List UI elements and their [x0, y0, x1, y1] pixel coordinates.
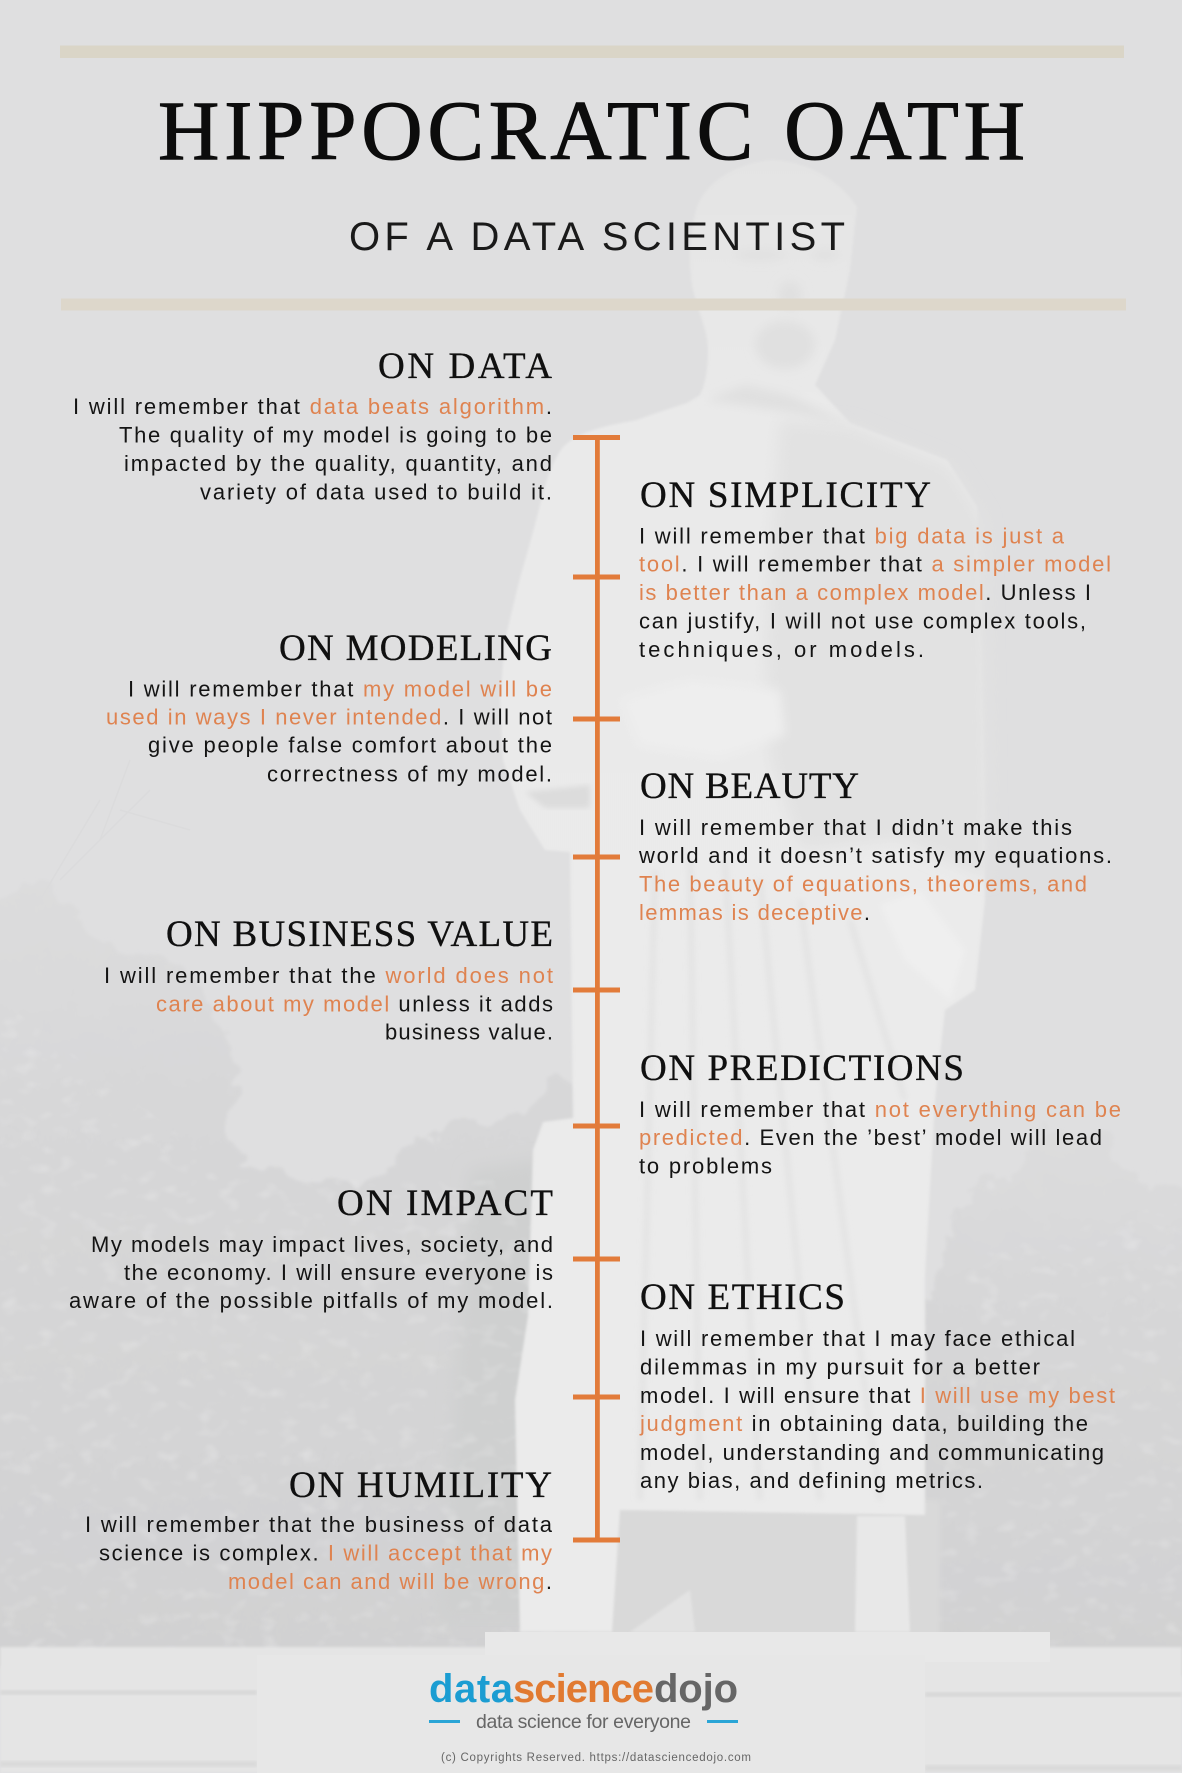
plinth and ledges — [0, 1632, 1182, 1773]
body: give people false comfort about the — [148, 732, 552, 758]
timeline — [573, 435, 620, 1542]
body — [639, 1097, 1121, 1178]
statue — [500, 160, 990, 1632]
body — [85, 1512, 553, 1594]
body: impacted by the quality, quantity, and — [124, 451, 552, 476]
body: I will remember that the business of data — [85, 1512, 553, 1537]
right hand — [880, 890, 965, 1000]
body: correctness of my model. — [267, 762, 552, 786]
body: to problems — [639, 1154, 772, 1178]
panel: on predictions — [639, 1048, 1121, 1178]
body: lemmas is deceptive. — [639, 900, 870, 925]
left foliage — [0, 760, 600, 1670]
body: model can and will be wrong. — [228, 1569, 552, 1594]
logo wordmark: dojo — [654, 1667, 738, 1711]
right foliage — [900, 1130, 1182, 1670]
heading: ON PREDICTIONS — [640, 1048, 964, 1089]
lower header bar — [61, 298, 1126, 310]
heading: ON MODELING — [279, 628, 552, 669]
body: is better than a complex model. Unless I — [639, 580, 1091, 605]
panel: on modeling — [106, 628, 552, 786]
heading: ON DATA — [378, 346, 552, 387]
dark ground behind the feet — [590, 1500, 940, 1640]
body: predicted. Even the ’best’ model will lead — [639, 1125, 1102, 1150]
body: world and it doesn’t satisfy my equations. — [638, 843, 1112, 868]
body: I will remember that my model will be — [128, 676, 552, 702]
body: business value. — [385, 1020, 553, 1044]
body: I will remember that data beats algorithm. — [73, 394, 552, 419]
body: I will remember that not everything can be — [639, 1097, 1121, 1122]
body — [639, 1326, 1115, 1493]
panel: on ethics — [639, 1277, 1115, 1493]
panel: on data — [73, 346, 552, 504]
panel: on beauty — [638, 766, 1112, 925]
body: any bias, and defining metrics. — [640, 1468, 983, 1493]
body: The beauty of equations, theorems, and — [639, 872, 1087, 896]
logo wordmark: data — [429, 1667, 514, 1711]
footer logo panel — [257, 1655, 925, 1773]
panel: on simplicity — [639, 475, 1111, 662]
body: judgment in obtaining data, building the — [639, 1411, 1088, 1436]
panel: on humility — [85, 1465, 553, 1594]
heading: ON HUMILITY — [289, 1465, 552, 1506]
body — [104, 963, 553, 1044]
body: science is complex. I will accept that my — [99, 1540, 552, 1566]
heading: ON IMPACT — [337, 1183, 553, 1224]
body: I will remember that I didn’t make this — [639, 815, 1072, 840]
title: HIPPOCRATIC OATH — [158, 84, 1025, 178]
body: tool. I will remember that a simpler model — [639, 552, 1111, 577]
body: care about my model unless it adds — [156, 992, 553, 1016]
body: I will remember that big data is just a — [639, 524, 1065, 548]
heading: ON BEAUTY — [640, 766, 859, 807]
shaded chest and arm — [765, 420, 990, 880]
heading: ON SIMPLICITY — [640, 475, 931, 516]
logo wordmark: science — [513, 1667, 654, 1711]
copyright: (c) Copyrights Reserved. https://datasciencedojo.com — [441, 1752, 751, 1764]
top decorative bar — [60, 46, 1124, 58]
heading: ON ETHICS — [640, 1277, 845, 1318]
body: the economy. I will ensure everyone is — [124, 1260, 553, 1285]
panel: on business value — [104, 914, 553, 1044]
body: My models may impact lives, society, and — [91, 1232, 553, 1257]
body: I will remember that I may face ethical — [640, 1326, 1075, 1351]
face and beard shading — [705, 250, 850, 425]
body: techniques, or models. — [639, 637, 924, 662]
body: The quality of my model is going to be — [119, 422, 552, 448]
body: can justify, I will not use complex tools, — [639, 608, 1086, 634]
body — [73, 394, 552, 504]
body — [106, 676, 552, 786]
logo wordmark — [429, 1667, 738, 1711]
logo tagline: data science for everyone — [476, 1711, 691, 1733]
heading: ON BUSINESS VALUE — [166, 914, 553, 955]
tagline dashes — [429, 1720, 738, 1723]
body: model. I will ensure that I will use my best — [640, 1383, 1115, 1408]
hanging hand shadow — [525, 785, 590, 808]
subtitle: OF A DATA SCIENTIST — [349, 215, 845, 259]
body: dilemmas in my pursuit for a better — [640, 1354, 1040, 1380]
body — [639, 524, 1111, 662]
body: used in ways I never intended. I will not — [106, 704, 552, 730]
panel: on impact — [69, 1183, 553, 1313]
body — [69, 1232, 553, 1313]
body: I will remember that the world does not — [104, 963, 553, 988]
drapery folds — [640, 860, 905, 1500]
body: model, understanding and communicating — [640, 1440, 1104, 1465]
body: aware of the possible pitfalls of my model. — [69, 1288, 553, 1313]
body — [638, 815, 1112, 925]
body: variety of data used to build it. — [200, 480, 552, 504]
light hand — [622, 680, 785, 757]
